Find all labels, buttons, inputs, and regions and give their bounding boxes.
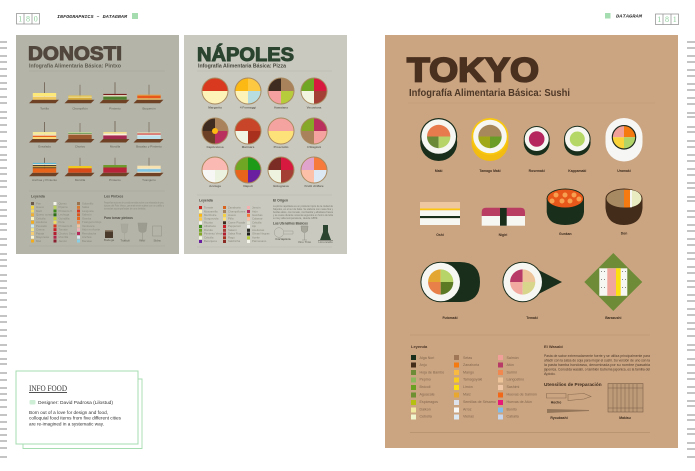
legend: Nápoles: Leyenda	[199, 198, 213, 202]
icon: Makisu mat: Makisu	[619, 416, 631, 420]
panel: Info Food text box	[16, 371, 142, 448]
pizza row 1: Vesuviana	[307, 106, 322, 110]
text block: El Wasabi: El Wasabi	[544, 344, 563, 349]
legend: Tokyo: Arroz	[463, 408, 472, 412]
legend: Tokyo: Anju	[420, 363, 427, 367]
sushi: Temaki	[502, 262, 562, 320]
text block: El Wasabi: Apiolo.	[544, 372, 556, 376]
text block: El Wasabi: añadir con la salsa de soja para mojar el sushi. Su versión de uno son la	[544, 358, 651, 362]
icons: drinks	[104, 223, 162, 242]
subtitle: Tokyo: Infografía Alimentaria Básica: Sushi	[409, 87, 570, 99]
heading: Info Food: INFO FOOD	[29, 383, 67, 393]
legend: Nápoles: Albahaca	[204, 224, 216, 228]
legend: Donosti: Solomillo	[82, 202, 94, 206]
icons: drinks: Sidra	[153, 238, 161, 242]
text block: La Pizza: y se cuece durante noventa segundos en horno de leña	[273, 213, 334, 217]
legend: Nápoles: Piña	[228, 216, 234, 220]
legend: Nápoles: Ricotta	[204, 220, 213, 224]
legend: Nápoles: Mozzarella	[204, 210, 218, 214]
text block: El Wasabi: Pasta de sabor extremadamente fuerte y se utiliza principalmente para	[544, 354, 651, 358]
heading: Utensilios de Preparación: Utensilios de Preparación	[544, 382, 602, 387]
legend: Donosti: Anchoa	[82, 235, 92, 239]
pintxo row 1: Boquerón	[142, 106, 156, 110]
text block: El Wasabi: japonica. Conocida wasabi, o también Eutrema japonica, es la familia del	[543, 368, 650, 372]
pintxo row 3: Morcilla	[75, 178, 85, 182]
text block: Los Pintxos: Para tomar pintxos	[104, 216, 133, 220]
pizza row 3: Frutti di Mare	[304, 184, 324, 188]
text block: description: colloquial food items from five different cities	[29, 416, 122, 420]
sushi: Maki	[420, 118, 457, 173]
sushi: Temaki: Temaki	[526, 316, 538, 320]
text block: La Pizza: El Origen	[273, 198, 288, 202]
legend: Donosti: Ventresca	[82, 224, 95, 228]
legend: Tokyo: Zanahoria	[463, 363, 479, 367]
page number 181: 1	[673, 15, 677, 24]
heading: Tokyo: TOKYO	[407, 52, 539, 90]
sushi: Gunkan	[547, 188, 584, 236]
text block: Los Pintxos: típicas del País Vasco, generalmente sujetas con un palillo y	[104, 204, 165, 208]
sushi: Nigiri: Nigiri	[499, 233, 507, 237]
icon: Makisu mat	[608, 384, 643, 420]
legend: Donosti: Pimiento R.	[58, 224, 73, 228]
legend: Tokyo: Leyenda	[411, 344, 428, 349]
legend: Donosti: Gamba	[82, 216, 92, 220]
legend: Nápoles: Salsa Fina	[228, 232, 242, 236]
legend: Donosti: Jamón	[58, 239, 67, 243]
icons: pizza tools and drinks: Vino Tinto	[298, 240, 311, 244]
legend: Donosti: Mayonesa	[36, 235, 49, 239]
page number 181: 8	[665, 15, 669, 24]
legend: Nápoles: Pepperoni	[228, 224, 241, 228]
sushi: Uramaki: Uramaki	[617, 169, 631, 173]
legend: Nápoles: Huevo	[228, 213, 237, 217]
heading: Nápoles: NÁPOLES	[197, 44, 294, 66]
pintxo row 2: Bacalao y Pimiento	[136, 144, 162, 148]
legend: Nápoles: Mel Dulce	[204, 213, 217, 217]
legend: Tokyo: Bonito	[506, 408, 517, 412]
sushi: Nigiri	[482, 208, 525, 237]
legend: Tokyo: Vieiras	[463, 414, 474, 418]
legend: Donosti: Bacalao	[82, 239, 93, 243]
legend: Tokyo: Aguacate	[420, 392, 435, 396]
legend: Donosti: Pescado	[36, 224, 47, 228]
designer credit: Designer: David Padrosa (Lilostud)	[38, 400, 113, 405]
legend: Nápoles: Zanahoria	[228, 206, 241, 210]
legend: Donosti: Piparra	[58, 205, 68, 209]
pizza row 2	[202, 118, 327, 149]
text block: description: Born out of a love for design and food,	[29, 410, 108, 415]
legend: Nápoles: Champiñones	[228, 210, 246, 214]
text block: description	[29, 410, 122, 426]
legend: Donosti: Tomate	[58, 228, 68, 232]
icon: Hocho knife: Hocho	[551, 400, 561, 404]
legend: Donosti: Atún en Aceite	[82, 228, 100, 232]
sushi: Tamago Maki	[472, 118, 508, 173]
legend: Nápoles: Gambas	[252, 213, 263, 217]
legend: Nápoles: Rúcula	[204, 228, 213, 232]
pintxo row 1: Champiñón	[72, 106, 88, 110]
panel: Donosti poster	[16, 35, 179, 254]
legend: Tokyo: Limón	[463, 385, 473, 389]
text block: La Pizza: La pizza napolitana es un producto típico de la ciudad de	[273, 204, 334, 208]
pintxo row 2: Chorizo	[75, 144, 85, 148]
pizza row 3: Napoli	[243, 184, 253, 188]
pintxo row 2: Morcilla	[110, 144, 120, 148]
sushi: Don: Don	[621, 232, 627, 236]
pintxo row 3: Txangurro	[142, 178, 156, 182]
text block: La Pizza	[273, 198, 334, 226]
sushi: Rosemaki: Rosemaki	[529, 169, 545, 173]
icons: drinks: Txakoli	[120, 238, 130, 242]
pintxo row 1	[29, 82, 164, 110]
legend: Donosti: Chorizo Seco	[58, 232, 76, 236]
heading: Donosti: DONOSTI	[28, 44, 122, 65]
legend: Tokyo: Surimi	[506, 370, 517, 374]
legend: Tokyo: Alga Nori	[420, 356, 434, 360]
legend: Nápoles: Carne Picada	[228, 220, 245, 224]
legend: Nápoles: Pimiento Verde	[204, 232, 223, 236]
page number 180: 8	[26, 14, 30, 24]
legend: Tokyo: Atún	[506, 363, 514, 367]
legend: Donosti: Txangurro Rojo	[82, 220, 102, 224]
legend: Tokyo: Huevas de Atún	[506, 400, 532, 404]
legend: Nápoles: Salami	[228, 228, 237, 232]
sushi: Barazushi	[584, 253, 642, 320]
icons: pizza tools and drinks	[274, 225, 333, 244]
pizza row 1: Hawaiana	[274, 106, 288, 110]
legend: Tokyo: Mango	[463, 370, 474, 374]
text block: La Pizza: Nápoles, en el sur de Italia. Se elabora con masa fina y	[273, 207, 334, 211]
page number 181: 1	[657, 15, 661, 24]
text block: El Wasabi	[543, 344, 651, 376]
legend: Donosti: Salmón	[82, 212, 92, 216]
page number 180: 0	[34, 14, 38, 24]
legend: Tokyo: Pepino	[420, 378, 431, 382]
legend: Donosti: Miel	[36, 239, 42, 243]
legend: Donosti: Pan	[36, 202, 41, 206]
icons: pizza tools and drinks: Limoncello	[318, 240, 333, 244]
legend: Tokyo: Daikon	[420, 408, 431, 412]
legend: Donosti: Maíz	[36, 209, 43, 213]
legend: Donosti: Queso curado	[36, 212, 54, 216]
icons: drinks: Vino	[139, 238, 145, 242]
icon: Ryoubashi chopsticks	[547, 409, 589, 420]
legend: Donosti: Lechuga	[58, 212, 70, 216]
running header left: INFOGRAPHICS – DATAGRAM	[57, 15, 127, 20]
icon: Hocho knife	[546, 394, 591, 404]
legend: Tokyo: Brócoli	[420, 385, 431, 389]
text block: Los Pintxos: Los Pintxos	[104, 194, 123, 198]
subtitle: Donosti: Infografía Alimentaria Básica: Pintxo	[29, 64, 121, 70]
page number 180: 1	[18, 14, 22, 24]
sushi: Maki: Maki	[435, 169, 443, 173]
pintxo row 1: Tortilla	[40, 106, 49, 110]
legend: Nápoles: Ajo	[252, 224, 256, 228]
legend: Nápoles: Gorgonzola	[204, 216, 219, 220]
sushi: Gunkan: Gunkan	[559, 232, 572, 236]
legend: Donosti: Remolacha	[82, 232, 97, 236]
legend: Nápoles: Cebolla	[204, 236, 214, 240]
legend: Nápoles: Ragú	[228, 236, 235, 240]
legend: Tokyo: Sashimi	[506, 385, 519, 389]
pizza row 1	[202, 78, 327, 110]
legend: Donosti: Morcilla	[58, 235, 69, 239]
pintxo row 2	[29, 121, 164, 148]
legend: Nápoles: Cebolla	[252, 220, 262, 224]
sushi: Oshi: Oshi	[436, 233, 444, 237]
legend: Tokyo: Salmón	[506, 356, 519, 360]
text block: La Pizza: Los Utensilios Básicos	[273, 222, 308, 226]
pizza row 1: Margarita	[208, 106, 222, 110]
text block: La Pizza: a muy alta temperatura, desde 1889.	[273, 216, 318, 220]
legend: Donosti: Cebolla	[36, 216, 46, 220]
text block: La Pizza: bordes altos, con tomate, mozzarella y albahaca fresca	[273, 210, 334, 214]
page number 181	[656, 14, 678, 24]
text block: Los Pintxos	[104, 194, 165, 220]
legend: Tokyo: Langostino	[506, 378, 524, 382]
legend: Nápoles	[199, 198, 270, 243]
legend: Donosti: Crema	[36, 228, 45, 232]
pintxo row 3	[29, 158, 164, 182]
pizza row 2: Prosciutto	[274, 145, 289, 149]
legend: Tokyo	[411, 344, 537, 420]
text block: El Wasabi: la pasta hamba hondowsu, denominada por su nombre (wasabia	[544, 363, 651, 367]
legend: Nápoles: Jamón	[252, 206, 261, 210]
pintxo row 3: Anchoa y Pimiento	[32, 178, 57, 182]
legend: Donosti: Langosta	[82, 209, 94, 213]
legend: Tokyo: Cebolla	[420, 414, 432, 418]
icons: pizza tools and drinks: Cortapizza	[275, 237, 291, 241]
right page edge tick marks	[687, 42, 695, 457]
pintxo row 3: Pimiento	[109, 178, 121, 182]
legend: Nápoles: Atún	[252, 210, 258, 214]
pizza row 3: Bolognesa	[273, 184, 289, 188]
legend: Tokyo: Maíz	[463, 392, 471, 396]
running header right: DATAGRAM	[616, 14, 642, 20]
page number 180	[16, 14, 40, 24]
running header left	[57, 13, 138, 20]
legend: Nápoles: Aceitunas	[252, 228, 265, 232]
sushi: Uramaki	[606, 118, 642, 173]
text block: Los Pintxos: tomadas acompañadas de una bebida.	[104, 206, 146, 210]
legend: Nápoles: Aceite	[252, 236, 260, 240]
icon: Ryoubashi chopsticks: Ryoubashi	[550, 416, 568, 420]
sushi: Kappamaki	[564, 126, 591, 173]
icons: drinks: Bodega	[104, 238, 115, 242]
pizza row 2: Capricciosa	[206, 145, 224, 149]
pizza row 1: 4 Formaggi	[240, 106, 256, 110]
text block: description: are re-imagined in a systematic way.	[29, 422, 104, 426]
legend: Tokyo: Tamagoyaki	[463, 378, 482, 382]
sushi: Barazushi: Barazushi	[605, 316, 621, 320]
legend: Tokyo: Huevas de Salmón	[506, 392, 537, 396]
legend: Donosti: Aceituna	[36, 220, 47, 224]
legend: Nápoles: Olivas Negras	[252, 232, 270, 236]
legend: Donosti	[31, 194, 102, 243]
legend: Nápoles: Parmesano	[252, 239, 267, 243]
sushi: Rosemaki	[524, 126, 550, 173]
legend: Nápoles: Salchicha	[228, 239, 241, 243]
sushi: Don	[606, 188, 642, 236]
legend: Tokyo: Setas	[463, 356, 472, 360]
sushi: Oshi	[420, 202, 460, 237]
sushi: Futomaki	[420, 262, 480, 320]
sushi: Futomaki: Futomaki	[442, 316, 458, 320]
pizza row 2: 4 Stagioni	[307, 145, 321, 149]
legend: Donosti: Patata	[36, 232, 45, 236]
sushi: Tamago Maki: Tamago Maki	[479, 169, 501, 173]
panel: Tokyo poster	[385, 35, 678, 448]
legend: Tokyo: Espárragos	[420, 400, 438, 404]
legend: Tokyo: Semillas de Sésamo	[463, 400, 496, 404]
legend: Tokyo: Caballa	[506, 414, 519, 418]
legend: Donosti: Leyenda	[31, 194, 45, 198]
sushi: Kappamaki: Kappamaki	[568, 169, 586, 173]
pizza row 3: Acciuga	[209, 184, 221, 188]
legend: Tokyo: Hoja de Bambú	[420, 370, 444, 374]
legend: Donosti: Queso	[58, 202, 67, 206]
legend: Donosti: Salsa	[82, 205, 89, 209]
subtitle: Nápoles: Infografía Alimentaria Básica: Pizza	[198, 64, 286, 70]
legend: Donosti: Guindilla	[58, 216, 70, 220]
text block: Los Pintxos: Pequeñas raciones de comida servidas sobre una rebanada de pan,	[104, 200, 164, 204]
panel: Nápoles poster	[184, 35, 347, 254]
left page edge tick marks	[0, 42, 7, 457]
running header right	[605, 13, 642, 20]
legend: Donosti: Huevo	[36, 205, 45, 209]
legend: Donosti: Pera	[58, 220, 65, 224]
pizza row 2: Marinara	[242, 145, 255, 149]
legend: Nápoles: Berenjena	[204, 239, 217, 243]
pizza row 3	[202, 157, 327, 188]
legend: Nápoles: Calamar	[252, 216, 263, 220]
pintxo row 2: Ensalada	[38, 144, 51, 148]
legend: Nápoles: Tomate	[204, 206, 214, 210]
legend: Donosti: Pimiento V.	[58, 209, 73, 213]
pintxo row 1: Pimiento	[109, 106, 121, 110]
